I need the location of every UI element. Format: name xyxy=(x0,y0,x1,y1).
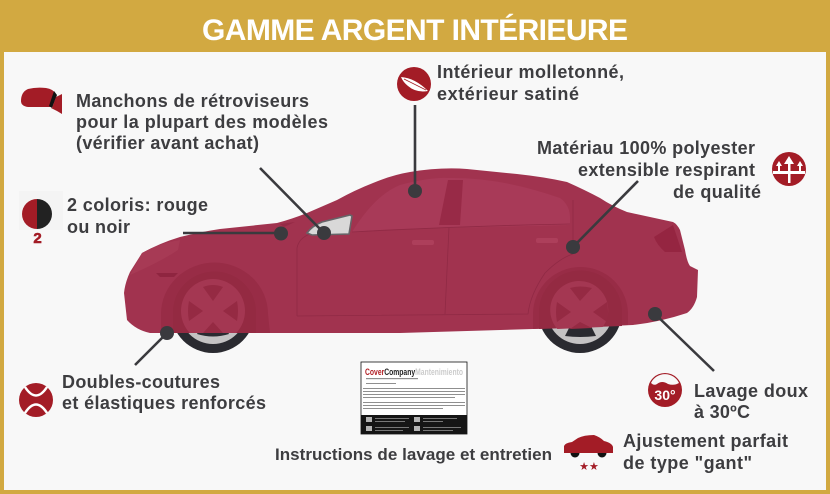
text: glove fit: de type "gant" xyxy=(623,453,752,473)
text: mirror covers: Manchons de rétroviseurs xyxy=(76,91,309,111)
wing mirror window xyxy=(307,215,352,235)
car illustration xyxy=(124,168,698,353)
text: mirror covers xyxy=(76,91,328,153)
care label xyxy=(361,362,467,434)
door pillar xyxy=(439,180,463,225)
text: seams: Doubles-coutures xyxy=(62,372,220,392)
text: gentle wash: à 30ºC xyxy=(694,402,750,422)
icon: feather xyxy=(397,67,431,101)
callout line: interior xyxy=(408,105,422,198)
label brand: CoverCompanyMantenimiento xyxy=(365,367,463,378)
text: mirror covers: pour la plupart des modèles xyxy=(76,112,328,132)
icon: two colours xyxy=(19,191,63,247)
text: polyester: Matériau 100% polyester xyxy=(537,138,755,158)
text: mirror covers: (vérifier avant achat) xyxy=(76,133,259,153)
icon: two colours: 2 xyxy=(33,230,42,247)
icon: stretch arrows xyxy=(772,152,806,186)
hood facet xyxy=(130,240,180,275)
text: seams xyxy=(62,372,266,413)
text: gentle wash xyxy=(694,381,808,422)
callout line: washing xyxy=(648,307,714,371)
side windows xyxy=(352,178,570,232)
label body text xyxy=(363,378,465,409)
title: GAMME ARGENT INTÉRIEURE xyxy=(202,13,628,47)
rear wheel arch xyxy=(533,267,628,329)
door handles xyxy=(412,238,558,245)
text: seams: et élastiques renforcés xyxy=(62,393,266,413)
callout line: polyester xyxy=(566,181,638,254)
text: interior xyxy=(437,62,624,104)
text: washing instructions: Instructions de lavage et entretien xyxy=(275,445,552,464)
icon: wash 30 degrees xyxy=(648,373,682,407)
callout line: mirrors xyxy=(260,168,331,240)
front wheel arch xyxy=(161,263,270,333)
rear wheel xyxy=(538,269,622,353)
icon: fitted car xyxy=(564,435,613,473)
front wheel xyxy=(171,269,255,353)
text: colours: 2 coloris: rouge xyxy=(67,195,208,215)
text: colours xyxy=(67,195,208,237)
icon: mirror xyxy=(21,88,62,114)
callout line: seams xyxy=(135,326,174,365)
text: colours: ou noir xyxy=(67,217,130,237)
text: glove fit: Ajustement parfait xyxy=(623,431,788,451)
door lines xyxy=(297,200,573,316)
text: gentle wash: Lavage doux xyxy=(694,381,808,401)
callout line: colours xyxy=(183,226,288,240)
text: polyester: de qualité xyxy=(673,182,761,202)
text: glove fit xyxy=(623,431,788,473)
tail light xyxy=(654,225,682,252)
text: interior: Intérieur molletonné, xyxy=(437,62,624,82)
icon: double seams xyxy=(19,383,53,417)
text: polyester xyxy=(537,138,761,202)
text: polyester: extensible respirant xyxy=(578,160,755,180)
icon: wash 30 degrees: 30° xyxy=(654,387,676,403)
label footer xyxy=(361,415,467,434)
text: interior: extérieur satiné xyxy=(437,84,579,104)
icon: fitted car: ★★ xyxy=(579,460,599,473)
car body xyxy=(124,168,698,333)
headlight xyxy=(156,273,178,277)
hood crease xyxy=(280,222,295,227)
